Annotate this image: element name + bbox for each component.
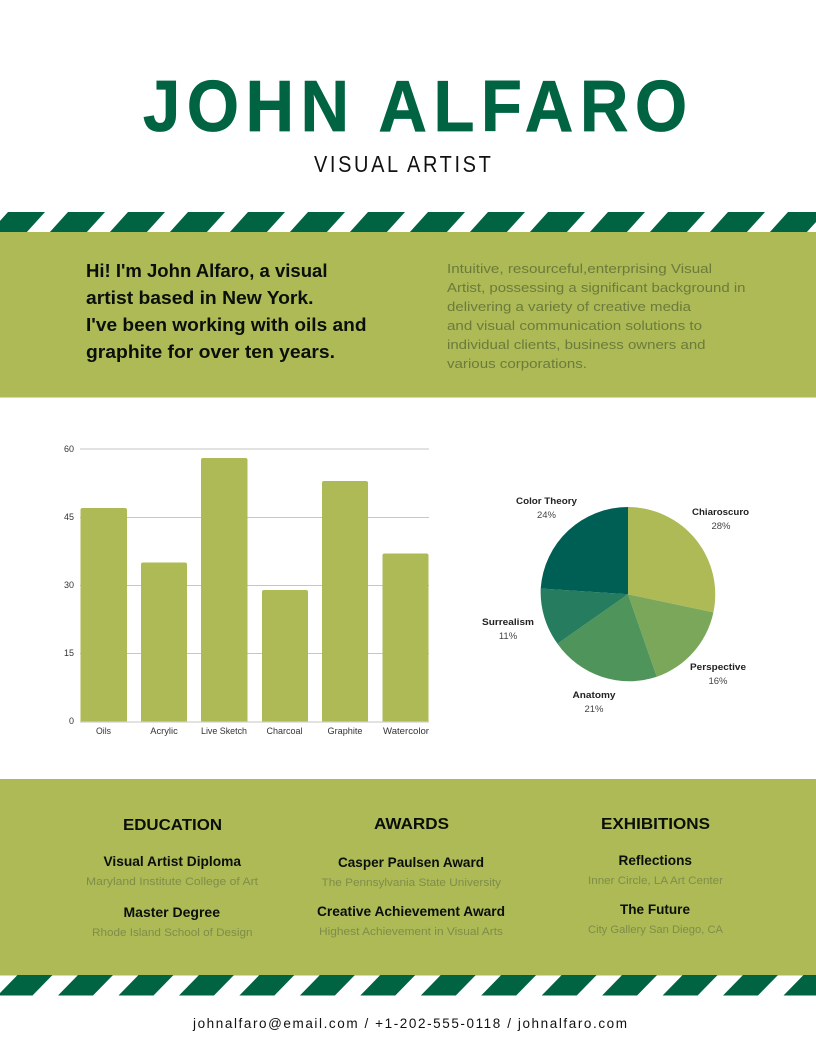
pie labels: Color Theory <box>516 496 577 506</box>
panel: credentials <box>0 779 816 976</box>
pie labels: 28% <box>711 521 731 532</box>
column: awards: Highest Achievement in Visual Arts <box>319 926 504 938</box>
bars <box>80 458 428 722</box>
y axis labels <box>64 444 74 726</box>
column: awards <box>317 816 505 938</box>
y axis labels: 60 <box>64 444 74 454</box>
pie labels: 16% <box>708 676 728 687</box>
bottom diagonal stripe band <box>0 975 816 996</box>
title: name: JOHN ALFARO <box>143 66 687 147</box>
pie labels: 24% <box>537 510 557 521</box>
top diagonal stripe band <box>0 212 816 233</box>
pie slices <box>541 507 715 681</box>
pie chart <box>482 496 750 715</box>
intro headline <box>86 261 366 362</box>
pie labels: Chiaroscuro <box>692 507 750 517</box>
column: awards: Casper Paulsen Award <box>338 854 484 870</box>
pie labels <box>482 496 750 715</box>
column: exhibitions: Inner Circle, LA Art Center <box>588 875 723 887</box>
y axis labels: 0 <box>69 716 74 726</box>
column: exhibitions: The Future <box>620 901 690 917</box>
column: education: Visual Artist Diploma <box>104 853 241 869</box>
intro description: Intuitive, resourceful,enterprising Visual <box>447 261 712 276</box>
column: exhibitions <box>588 816 724 936</box>
column: education: Master Degree <box>124 904 220 920</box>
x axis labels <box>96 726 429 736</box>
intro headline: I've been working with oils and <box>86 315 366 335</box>
y axis labels: 45 <box>64 512 74 522</box>
column: education <box>86 817 258 939</box>
intro description: and visual communication solutions to <box>447 318 702 333</box>
column: education: Maryland Institute College of Art <box>86 876 258 888</box>
x axis labels: Graphite <box>328 726 362 736</box>
column: exhibitions: EXHIBITIONS <box>601 816 710 833</box>
intro description <box>447 261 746 371</box>
pie labels: Perspective <box>690 662 746 672</box>
intro description: delivering a variety of creative media <box>447 299 692 314</box>
subtitle: role: VISUAL ARTIST <box>314 150 491 177</box>
intro headline: Hi! I'm John Alfaro, a visual <box>86 261 328 281</box>
pie labels: 21% <box>584 704 604 715</box>
x axis labels: Watercolor <box>383 726 429 736</box>
pie labels: 11% <box>499 631 518 642</box>
pie labels: Surrealism <box>482 617 534 627</box>
column: exhibitions: Reflections <box>618 852 692 868</box>
column: awards: Creative Achievement Award <box>317 903 505 919</box>
pie labels: Anatomy <box>572 690 616 700</box>
x axis labels: Oils <box>96 726 111 736</box>
x axis labels: Acrylic <box>150 726 178 736</box>
intro description: individual clients, business owners and <box>447 337 706 352</box>
panel: introduction <box>0 232 816 398</box>
intro description: Artist, possessing a significant background in <box>447 280 746 295</box>
column: awards: AWARDS <box>374 816 449 833</box>
intro headline: artist based in New York. <box>86 288 314 308</box>
intro description: various corporations. <box>447 356 587 371</box>
column: awards: The Pennsylvania State University <box>322 877 502 889</box>
intro headline: graphite for over ten years. <box>86 342 335 362</box>
bar chart <box>64 444 429 736</box>
footer contact line: johnalfaro@email.com / +1-202-555-0118 / johnalfaro.com <box>192 1016 627 1031</box>
y axis labels: 15 <box>64 648 74 658</box>
x axis labels: Live Sketch <box>201 726 247 736</box>
column: education: EDUCATION <box>123 817 222 834</box>
x axis labels: Charcoal <box>266 726 302 736</box>
column: exhibitions: City Gallery San Diego, CA <box>588 924 724 936</box>
y axis labels: 30 <box>64 580 74 590</box>
column: education: Rhode Island School of Design <box>92 927 252 939</box>
